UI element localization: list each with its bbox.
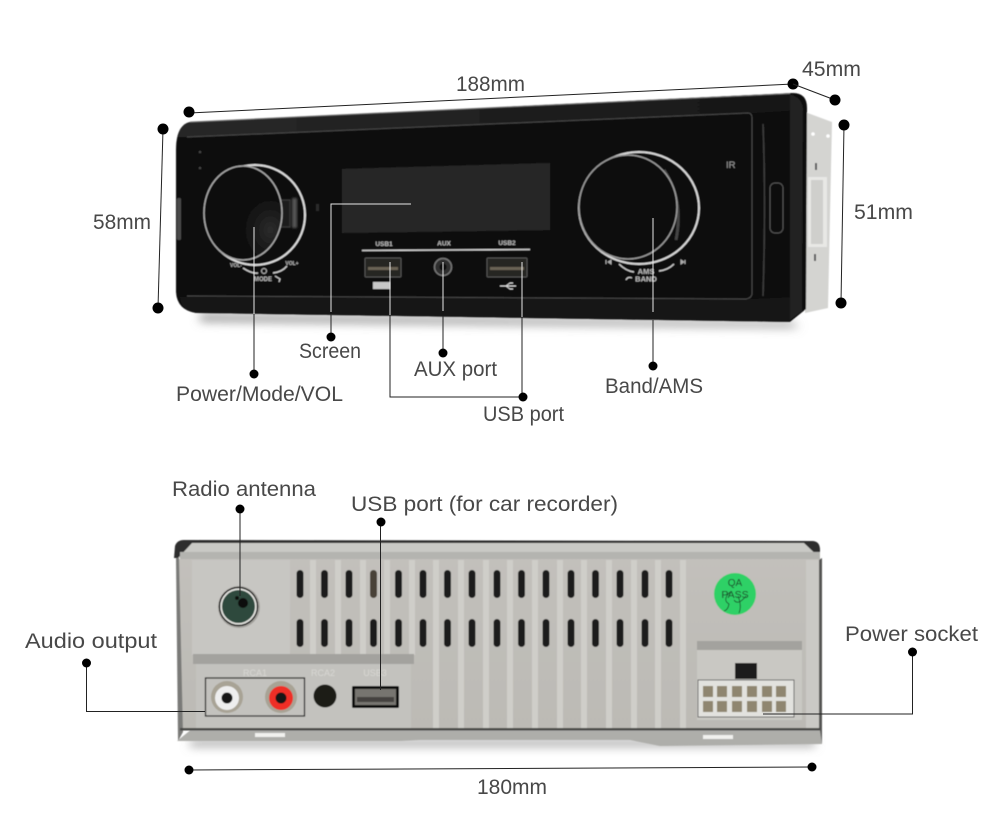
dimension 180mm: [184, 762, 816, 799]
USB1 port: [365, 258, 401, 289]
faceplate top band: [178, 93, 800, 137]
callout: band ams: Band/AMS: [605, 375, 703, 398]
dimension 45mm: 45mm: [802, 58, 861, 81]
lower vent slots: [296, 619, 672, 647]
upper vent slots: [296, 570, 672, 598]
callout: power socket: [763, 623, 978, 714]
IR label: IR: [726, 160, 736, 171]
faceplate bottom band: [180, 297, 795, 322]
dimension 188mm: 188mm: [456, 73, 525, 96]
callout: band ams: [605, 218, 703, 398]
right side slot: [770, 183, 783, 233]
vent ribs: [310, 560, 686, 730]
band knob: [579, 152, 699, 264]
dimension 51mm: [836, 120, 913, 308]
dimension 180mm: 180mm: [477, 776, 547, 799]
callout: aux port: [414, 262, 497, 381]
white RCA output: [211, 681, 243, 713]
power socket pins: [703, 686, 786, 712]
port labels: USB1: [375, 241, 393, 248]
callout: screen: Screen: [299, 340, 361, 363]
band knob markings: BAND: [635, 274, 657, 284]
dimension 188mm: [184, 73, 798, 118]
dimension 51mm: 51mm: [854, 201, 913, 224]
USB2 port: [487, 258, 527, 289]
inner panel outline: [187, 113, 752, 299]
power knob: [204, 165, 305, 265]
faceplate top highlight: [190, 94, 790, 122]
dimension 58mm: [93, 124, 168, 314]
callout: radio antenna: Radio antenna: [172, 478, 316, 501]
right edge lighter strip: [806, 560, 820, 730]
main metal back: [178, 559, 822, 730]
power socket housing: [697, 641, 802, 720]
rear USB port: [352, 686, 399, 708]
antenna socket: [218, 586, 260, 628]
port labels: USB2: [498, 240, 516, 247]
band knob markings: AMS: [638, 267, 654, 276]
callout: audio output: Audio output: [25, 630, 157, 653]
port labels: [362, 240, 530, 250]
top metal plate: [178, 543, 822, 560]
front panel unit: [176, 93, 832, 327]
rear panel unit: [174, 540, 822, 746]
power knob markings: MODE: [254, 277, 272, 283]
band knob markings: [606, 260, 685, 284]
right edge casing: [819, 558, 822, 744]
AUX jack: [434, 258, 452, 276]
round plug: [314, 684, 336, 708]
black rear casing corners: [174, 540, 820, 558]
drop shadow under front unit: [200, 314, 800, 327]
right side groove: [763, 124, 764, 296]
radio faceplate body: [176, 93, 807, 322]
rear panel faint labels: [243, 668, 387, 678]
callout: radio antenna: [172, 478, 316, 596]
port labels: AUX: [437, 240, 452, 248]
callout: rear usb port: [351, 493, 618, 690]
screen: [342, 163, 550, 233]
callout: usb port: USB port: [483, 403, 564, 426]
faceplate right bevel: [790, 95, 803, 320]
red RCA output: [265, 681, 297, 713]
callout: audio output: [25, 630, 205, 712]
rear panel faint labels: RCA2: [311, 668, 335, 678]
callout: aux port: AUX port: [414, 358, 497, 381]
left side notch: [177, 198, 181, 240]
indicator dots: [199, 151, 319, 211]
dimension 45mm: [793, 58, 861, 106]
callout: power socket: Power socket: [845, 623, 978, 646]
callout: rear usb port: USB port (for car recorder): [351, 493, 618, 516]
rear recess panel: [193, 654, 414, 728]
callout: screen: [299, 204, 411, 363]
rear panel faint labels: RCA1: [243, 668, 267, 678]
power knob markings: [230, 261, 299, 283]
dimension 58mm: 58mm: [93, 211, 151, 234]
callout: power mode volume: [176, 227, 343, 406]
QA pass sticker: PASS: [721, 589, 749, 601]
QA pass sticker: QA: [728, 578, 743, 589]
power knob markings: VOL-: [230, 263, 242, 269]
QA pass sticker: [714, 573, 756, 615]
callout: power mode volume: Power/Mode/VOL: [176, 383, 343, 406]
callout: usb port: [390, 262, 564, 426]
antenna block: [192, 560, 290, 655]
power knob markings: VOL+: [285, 261, 299, 267]
drop shadow under rear unit: [190, 740, 815, 746]
left edge casing: [176, 558, 183, 741]
side metal plate: [805, 112, 832, 313]
audio output box: [206, 678, 304, 716]
bottom metal plate: [177, 728, 822, 746]
rear panel faint labels: USB3: [363, 668, 387, 678]
